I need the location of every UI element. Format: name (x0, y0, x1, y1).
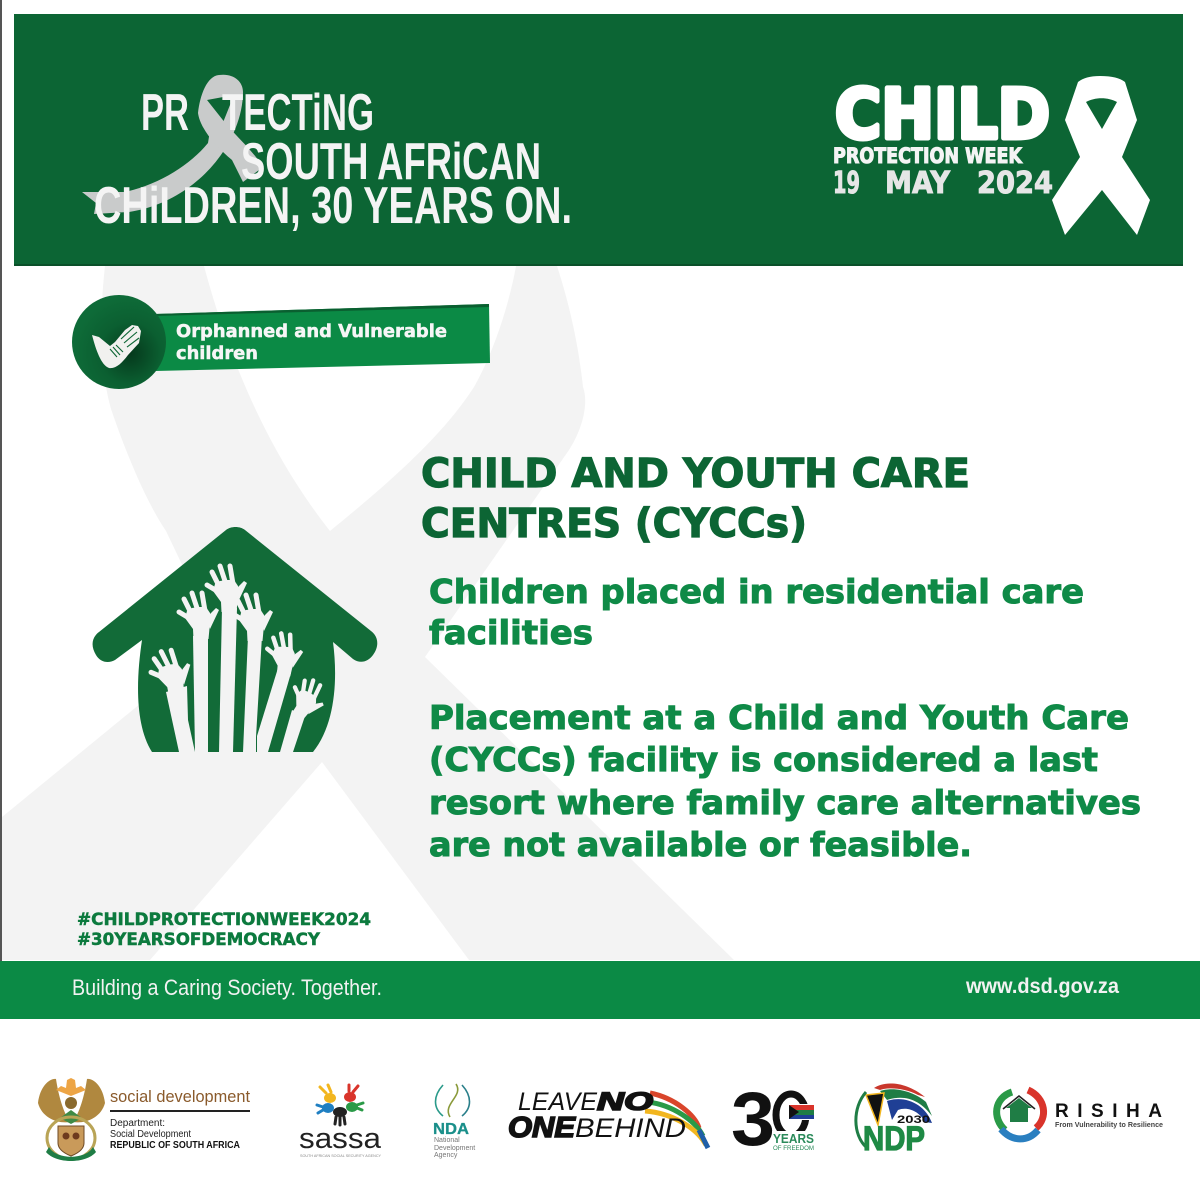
campaign title: CHiLDREN, 30 YEARS ON. (94, 177, 572, 235)
logo: 30 years of freedom: OF FREEDOM (773, 1145, 814, 1152)
white ribbon (1052, 76, 1150, 235)
child protection week logo: PROTECTION WEEK (833, 144, 1023, 168)
logo: Leave No One Behind: BEHIND (575, 1113, 686, 1143)
logo: sassa (299, 1085, 382, 1158)
hand 4 (233, 595, 273, 752)
logo: NDP 2030: 2030 (897, 1114, 930, 1126)
main heading (421, 451, 970, 547)
body text: Children placed in residential care (429, 572, 1084, 611)
logo: sassa: sassa (299, 1123, 382, 1155)
hand 3 (207, 566, 247, 752)
header banner (14, 14, 1183, 266)
badge circle (72, 295, 166, 389)
logo: NDP 2030: NDP (863, 1120, 925, 1158)
hand 2 (179, 593, 219, 752)
child protection week logo: 2024 (977, 166, 1053, 201)
logo: social development: REPUBLIC OF SOUTH AFRICA (110, 1140, 240, 1151)
logo: social development: social development (110, 1087, 250, 1106)
logo: RISIHA: From Vulnerability to Resilience (1055, 1120, 1163, 1129)
campaign title: TECTiNG (222, 84, 374, 142)
slogan: Building a Caring Society. Together. (72, 975, 382, 1000)
body text: (CYCCs) facility is considered a last (429, 740, 1098, 779)
hashtags: #30YEARSOFDEMOCRACY (77, 930, 321, 950)
child protection week logo (833, 75, 1053, 201)
child protection week logo: 19 (833, 166, 860, 201)
hand 1 (148, 648, 195, 752)
badge ribbon (155, 304, 490, 371)
category badge (72, 295, 490, 389)
logo: 30 years of freedom: YEARS (773, 1131, 814, 1146)
icon: joined hands (92, 325, 141, 368)
website: www.dsd.gov.za (965, 975, 1119, 998)
badge label: Orphanned and Vulnerable (176, 321, 447, 342)
logo: Leave No One Behind: LEAVE (518, 1088, 597, 1116)
logo: NDA: National (434, 1137, 460, 1144)
child protection week logo: MAY (885, 166, 951, 201)
logo: RISIHA (997, 1090, 1163, 1139)
body text: resort where family care alternatives (429, 783, 1141, 822)
campaign title: PR (141, 84, 189, 142)
campaign title (94, 84, 572, 235)
body text: facilities (429, 613, 593, 652)
logo: NDA: Development (434, 1145, 475, 1152)
hashtags (77, 910, 371, 950)
logo: NDA: Agency (434, 1152, 458, 1159)
body text (429, 572, 1141, 864)
body text: Placement at a Child and Youth Care (429, 698, 1129, 737)
hand 6 (280, 674, 332, 752)
child protection week logo: CHILD (835, 75, 1050, 155)
logo: RISIHA: RISIHA (1055, 1101, 1162, 1122)
grey awareness ribbon (82, 75, 263, 214)
badge label (176, 321, 447, 364)
logo: 30 years of freedom (731, 1077, 816, 1162)
logo: 30 years of freedom: 3 (731, 1077, 775, 1162)
logo: NDP 2030 (856, 1084, 932, 1158)
logo: Leave No One Behind: ONE (508, 1112, 577, 1144)
icon: house with raised hands (93, 527, 377, 752)
logo: Leave No One Behind: NO (597, 1088, 654, 1116)
logo: sassa: SOUTH AFRICAN SOCIAL SECURITY AGENCY (300, 1153, 381, 1158)
logo: social development: Social Development (110, 1129, 191, 1140)
hand 5 (257, 632, 305, 752)
campaign title: SOUTH AFRiCAN (241, 133, 541, 191)
logo: social development: Department: (110, 1118, 165, 1129)
main heading: CENTRES (CYCCs) (421, 501, 807, 547)
hashtags: #CHILDPROTECTIONWEEK2024 (77, 910, 371, 930)
body text: are not available or feasible. (429, 825, 972, 864)
coat of arms (38, 1078, 105, 1161)
background ribbon watermark (2, 266, 734, 960)
logo: NDA (433, 1084, 475, 1159)
logo: Leave No One Behind (508, 1088, 708, 1148)
logo: NDA: NDA (433, 1121, 469, 1138)
logo: social development (38, 1078, 250, 1161)
badge label: children (176, 343, 258, 364)
footer band (0, 961, 1200, 1019)
main heading: CHILD AND YOUTH CARE (421, 451, 970, 497)
